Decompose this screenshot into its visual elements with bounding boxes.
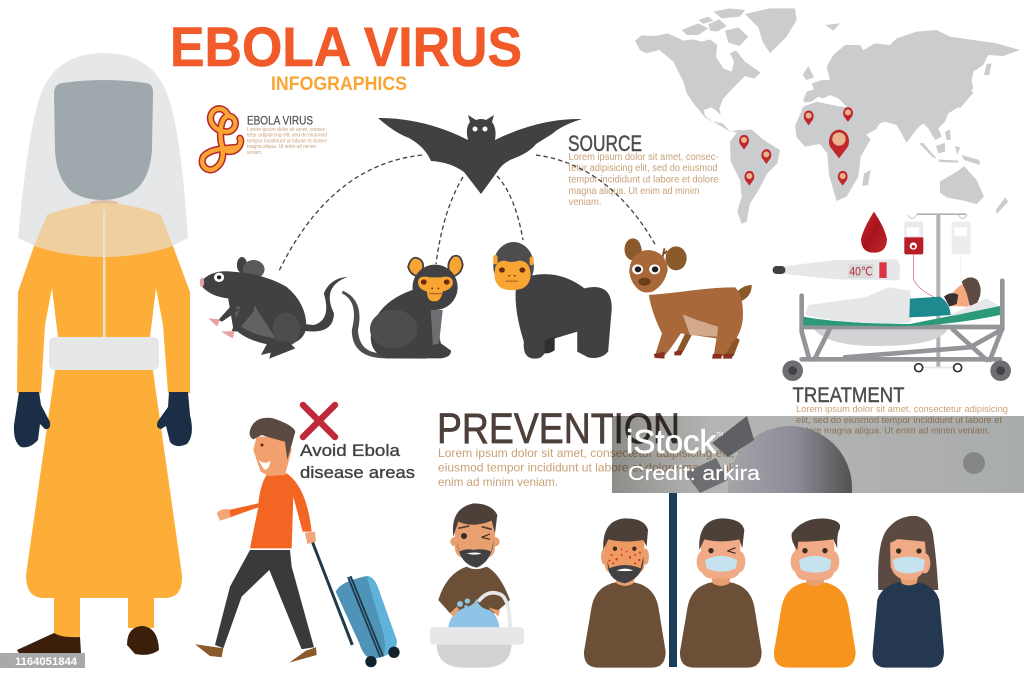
- uk, iceland, madagascar, japan: [803, 23, 992, 186]
- avoid icon: red x: [303, 405, 335, 437]
- map pins: [739, 107, 853, 186]
- text block: prevention: [438, 446, 774, 489]
- post separator: [669, 493, 677, 667]
- text block: source: tetur adipisicing elit, sed do eiusmod: [568, 163, 718, 174]
- protective suit figure: [14, 53, 192, 655]
- animal: monkey: [342, 256, 463, 359]
- sweater: [229, 473, 312, 548]
- person: man with mask winking: [680, 518, 762, 668]
- text block: source: veniam.: [568, 197, 602, 208]
- suitcase: [312, 540, 400, 667]
- text block: source: magna aliqua. Ut enim ad minim: [568, 186, 700, 197]
- text block: ebola virus: tempor incididunt ut labore et dolore: [247, 138, 327, 144]
- text block: treatment: elit, sed do eiusmod tempor incididunt ut labore et: [796, 415, 1002, 426]
- text block: prevention: Lorem ipsum dolor sit amet, consectetur adipisicing elit, sed do: [438, 446, 774, 460]
- title: EBOLA VIRUS: [170, 15, 522, 78]
- caption: avoid ebola: disease areas: [300, 463, 415, 482]
- man washing hands: [430, 503, 524, 668]
- text block: ebola virus: [247, 127, 327, 156]
- text block: treatment: dolore magna aliqua. Ut enim ad minim veniam.: [796, 426, 990, 436]
- icon: ebola worm: [202, 109, 241, 170]
- belt: [49, 337, 159, 370]
- north america: [635, 33, 761, 133]
- faucet: [478, 593, 510, 627]
- text block: ebola virus: tetur adipisicing elit, sed do eiusmod: [247, 133, 327, 139]
- logo text: iStock: [626, 423, 716, 460]
- image id tag: [0, 653, 85, 668]
- person: woman with mask: [873, 516, 944, 668]
- heading: source: SOURCE: [568, 131, 642, 156]
- smile: [258, 460, 271, 470]
- thermometer: 40℃: [849, 265, 873, 279]
- right shoe: [127, 626, 159, 655]
- text block: ebola virus: magna aliqua. Ut enim ad minim: [247, 144, 316, 150]
- eurasia: [803, 30, 1020, 143]
- neck: [90, 200, 118, 209]
- trousers: [215, 550, 314, 649]
- text block: prevention: eiusmod tempor incididunt ut labore et dolore magna aliqua. Ut: [438, 460, 774, 474]
- africa: [795, 102, 871, 201]
- trademark: TM: [716, 432, 723, 438]
- left glove: [14, 392, 50, 447]
- subtitle: INFOGRAPHICS: [271, 74, 407, 95]
- walking man with suitcase: [195, 418, 400, 667]
- thermometer: [773, 259, 900, 280]
- indonesia and philippines: [919, 129, 980, 165]
- heading: treatment: TREATMENT: [792, 384, 905, 407]
- water: [448, 598, 499, 627]
- world map: [635, 8, 1020, 224]
- heading: ebola virus: EBOLA VIRUS: [247, 116, 313, 128]
- heading: prevention: PREVENTION: [437, 405, 680, 453]
- text block: prevention: enim ad minim veniam.: [438, 475, 558, 489]
- watermark band: [612, 416, 1024, 493]
- hood: [18, 53, 188, 250]
- south america: [730, 129, 780, 224]
- animal: deer: [625, 238, 752, 359]
- hands: [217, 509, 316, 544]
- sink rim: [430, 627, 524, 645]
- zipper: [103, 210, 106, 337]
- patient: [805, 277, 999, 323]
- shoes: [195, 644, 317, 663]
- suit: [17, 245, 190, 637]
- left shoe: [17, 633, 81, 655]
- image id tag: 1164051844: [15, 656, 78, 668]
- animal: rat: [200, 257, 348, 359]
- head: [450, 503, 500, 568]
- small circle: [963, 452, 985, 474]
- greenland: [745, 8, 797, 53]
- text block: ebola virus: Lorem ipsum dolor sit amet, consec-: [247, 127, 327, 133]
- right glove: [157, 392, 192, 446]
- caption: avoid ebola: Avoid Ebola: [300, 441, 401, 460]
- neck and face: [253, 437, 292, 476]
- text block: source: Lorem ipsum dolor sit amet, consec-: [568, 152, 718, 163]
- treatment scene: [773, 212, 1011, 381]
- iv stand: [904, 213, 971, 372]
- person: man with mask: [774, 518, 856, 668]
- caption: avoid ebola: [300, 441, 415, 482]
- arctic islands: [682, 8, 748, 46]
- icon: bat: [378, 115, 582, 194]
- animal: gorilla: [493, 242, 612, 359]
- new zealand: [996, 197, 1008, 214]
- person: infected man: [584, 518, 666, 668]
- australia: [940, 166, 984, 204]
- sweater: [438, 567, 510, 613]
- dashed transmission arrows: [278, 155, 656, 273]
- hospital bed: [782, 281, 1011, 381]
- credit text: Credit: arkira: [628, 463, 761, 485]
- metallic circle: [728, 426, 852, 493]
- basin: [437, 643, 512, 668]
- text block: source: [568, 152, 719, 208]
- visor: [54, 80, 153, 200]
- text block: treatment: [796, 404, 1008, 436]
- hair: [250, 418, 295, 460]
- text block: source: tempor incididunt ut labore et dolore: [568, 174, 719, 186]
- hands and bubbles: [450, 598, 500, 617]
- text block: treatment: Lorem ipsum dolor sit amet, consectetur adipisicing: [796, 404, 1008, 415]
- text block: ebola virus: veniam.: [247, 150, 262, 156]
- icon: blood drop: [861, 212, 887, 253]
- shoulder cape: [34, 203, 173, 257]
- dark diamonds: [712, 416, 754, 457]
